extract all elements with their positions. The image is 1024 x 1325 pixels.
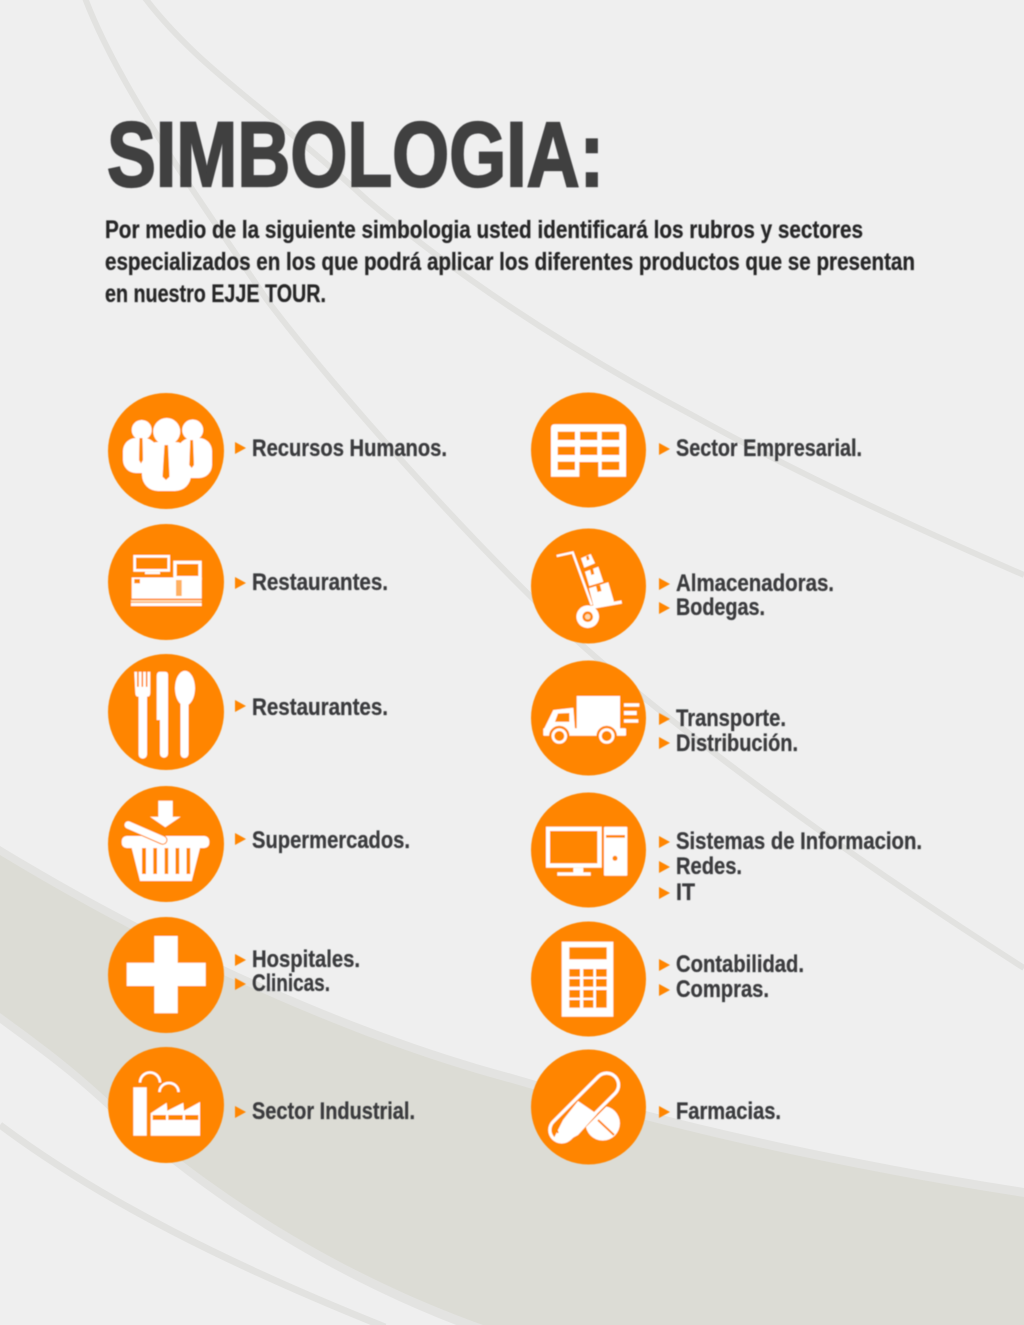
- label: Transporte, Distribución: Distribución.: [676, 730, 798, 757]
- label: Sistemas de Informacion, Redes, IT: IT: [676, 879, 695, 906]
- icon: people (Recursos Humanos): [108, 393, 224, 509]
- icon: medical cross (Hospitales): [108, 917, 224, 1033]
- label: Transporte, Distribución: [659, 705, 798, 757]
- icon: cash register (Restaurantes): [108, 524, 224, 640]
- label: Sistemas de Informacion, Redes, IT: [659, 828, 922, 906]
- icon: shopping basket (Supermercados): [108, 786, 224, 902]
- intro paragraph: en nuestro EJJE TOUR.: [105, 280, 326, 308]
- label: Contabilidad, Compras: Contabilidad.: [676, 951, 804, 978]
- label: Restaurantes (register): Restaurantes.: [252, 569, 388, 596]
- label: Sector Empresarial: Sector Empresarial.: [676, 435, 862, 462]
- label: Hospitales, Clinicas: Clinicas.: [252, 970, 330, 997]
- label: Recursos Humanos: Recursos Humanos.: [252, 435, 447, 462]
- icon: office building (Sector Empresarial): [531, 392, 646, 508]
- label: Almacenadoras, Bodegas: Bodegas.: [676, 594, 765, 621]
- label: Sistemas de Informacion, Redes, IT: Redes.: [676, 853, 742, 880]
- label: Sistemas de Informacion, Redes, IT: Sistemas de Informacion.: [676, 828, 922, 855]
- icon: pills (Farmacias): [531, 1050, 646, 1164]
- icon: desktop computer (Sistemas): [531, 792, 646, 908]
- intro paragraph: Por medio de la siguiente simbologia usted identificará los rubros y sectores: [105, 216, 863, 244]
- label: Restaurantes (cutlery): Restaurantes.: [252, 694, 388, 721]
- label: Hospitales, Clinicas: [235, 946, 360, 997]
- label: Supermercados: Supermercados.: [252, 827, 410, 854]
- intro paragraph: [105, 216, 915, 308]
- icon: cutlery (Restaurantes): [108, 654, 224, 770]
- label: Sector Industrial: Sector Industrial.: [252, 1098, 415, 1125]
- label: Contabilidad, Compras: [659, 951, 804, 1003]
- icon: delivery truck (Transporte): [531, 660, 646, 776]
- label: Almacenadoras, Bodegas: [659, 570, 834, 621]
- label: Almacenadoras, Bodegas: Almacenadoras.: [676, 570, 834, 597]
- icon: calculator (Contabilidad): [531, 922, 646, 1036]
- label: Contabilidad, Compras: Compras.: [676, 976, 769, 1003]
- label: Transporte, Distribución: Transporte.: [676, 705, 786, 732]
- label: Farmacias: Farmacias.: [676, 1098, 781, 1125]
- label: Hospitales, Clinicas: Hospitales.: [252, 946, 360, 973]
- title: SIMBOLOGIA:: [107, 104, 604, 206]
- icon: hand truck (Almacenadoras): [531, 528, 646, 644]
- icon: factory (Sector Industrial): [108, 1047, 224, 1163]
